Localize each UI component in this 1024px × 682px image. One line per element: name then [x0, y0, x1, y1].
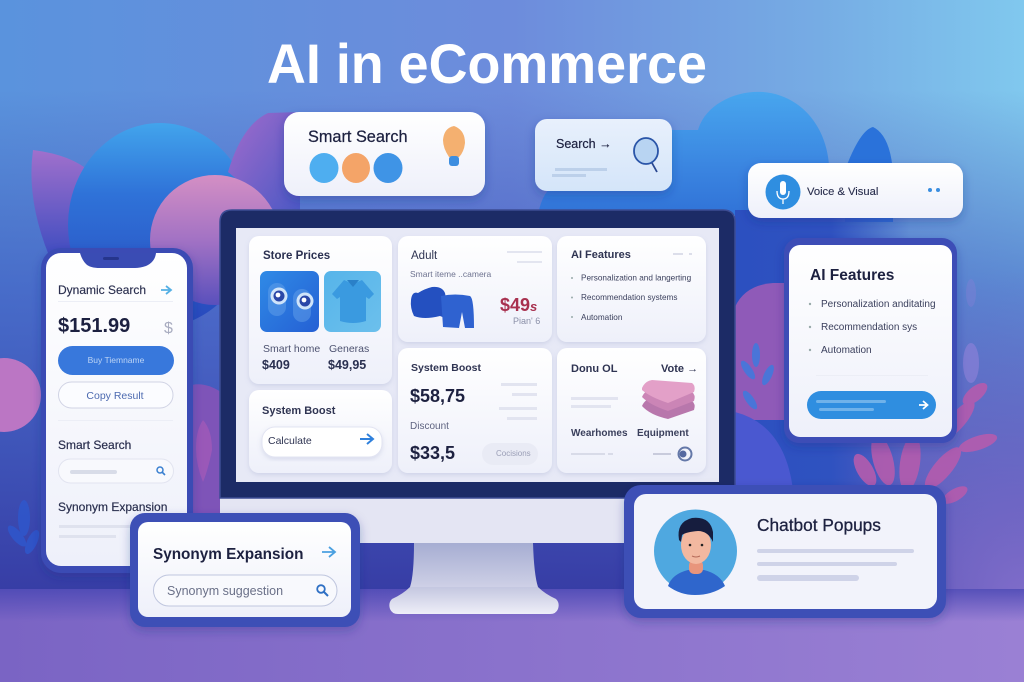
title: AI in eCommerce — [267, 32, 707, 95]
panel: System Boost prices: $33,5 — [410, 443, 455, 463]
monitor stand — [389, 543, 559, 614]
icon: microphone — [766, 174, 800, 210]
panel: Donu OL: Donu OL — [571, 363, 618, 375]
panel: Chatbot Popups: Chatbot Popups — [757, 515, 881, 535]
icon: pink stack — [642, 380, 695, 419]
floor — [0, 589, 1024, 682]
panel: System Boost prices — [398, 348, 552, 473]
panel: Donu OL: Equipment — [637, 428, 689, 439]
panel: Store Prices: $49,95 — [328, 358, 366, 372]
panel: System Boost calculate — [249, 390, 392, 473]
panel: Synonym Expansion card — [130, 513, 360, 627]
foliage: right — [849, 379, 999, 507]
icon: magnifier — [634, 138, 658, 172]
background shapes — [0, 92, 910, 530]
arrow — [322, 547, 335, 557]
panel: phone: $151.99 — [58, 315, 130, 337]
panel: Store Prices: $409 — [262, 358, 290, 372]
panel: Adult: Adult — [411, 250, 438, 262]
monitor — [220, 210, 735, 543]
panel: phone — [41, 248, 193, 573]
panel: AI Features large — [784, 238, 957, 443]
panel: System Boost prices: Cocisions — [496, 449, 531, 458]
avatar — [654, 510, 737, 595]
icon: eyes tile — [260, 271, 319, 332]
panel: System Boost prices: $58,75 — [410, 386, 465, 406]
panel: Adult: Smart iteme ..camera — [410, 269, 492, 279]
panel: Store Prices: Smart home — [263, 343, 320, 355]
icon: shirt tile — [324, 271, 381, 332]
panel: Store Prices: Store Prices — [263, 250, 330, 262]
panel: Synonym Expansion card: Synonym Expansion — [153, 546, 303, 563]
panel: System Boost calculate: Calculate — [268, 435, 312, 447]
search input: Synonym suggestion — [167, 584, 283, 598]
panel: AI Features small: Personalization and langerting — [581, 274, 692, 282]
panel: Adult — [398, 236, 552, 342]
panel: AI Features large: AI Features — [810, 267, 894, 284]
panel: phone: Smart Search — [58, 438, 131, 452]
panel: Donu OL: Wearhomes — [571, 428, 628, 439]
icon: light bulb — [443, 126, 465, 166]
button: buy: Buy Tiemname — [88, 355, 145, 365]
panel: Chatbot Popups — [624, 485, 946, 618]
panel: phone: Dynamic Search — [58, 283, 146, 297]
right blue blob — [538, 92, 832, 222]
button: buy — [58, 346, 174, 375]
panel: AI Features small: AI Features — [571, 249, 631, 261]
arrow — [360, 434, 373, 444]
arrow — [161, 286, 171, 294]
panel: AI Features small: Automation — [581, 313, 623, 322]
panel: Store Prices — [249, 236, 392, 384]
panel: Smart Search card — [284, 112, 485, 196]
panel: Store Prices: Generas — [329, 343, 369, 355]
panel: AI Features large: Personalization anditating — [821, 299, 936, 310]
panel: Voice & Visual — [748, 163, 963, 218]
search input — [154, 575, 337, 606]
panel: Smart Search card: Smart Search — [308, 128, 408, 146]
dots — [310, 153, 402, 183]
phone notch — [80, 253, 156, 268]
panel: AI Features small: Recommendation systems — [581, 293, 677, 302]
panel: AI Features large: Recommendation sys — [821, 322, 917, 333]
panel: System Boost prices: Discount — [410, 421, 449, 432]
panel: AI Features large: Automation — [821, 345, 872, 356]
icon: blue garments — [411, 287, 474, 328]
panel: Donu OL: Vote → — [661, 363, 698, 375]
panel: Adult: $49s — [500, 295, 537, 315]
button: copy result: Copy Result — [86, 390, 144, 402]
button: copy result — [58, 382, 173, 408]
panel: AI Features small — [557, 236, 706, 342]
foliage: pale leaves right — [963, 279, 979, 383]
panel: System Boost prices: System Boost — [411, 362, 482, 374]
panel: Donu OL — [557, 348, 706, 473]
panel: Voice & Visual: Voice & Visual — [807, 186, 878, 198]
panel: System Boost calculate: System Boost — [262, 405, 336, 417]
panel: phone: Synonym Expansion — [58, 500, 167, 514]
panel: Adult: Pian' 6 — [513, 316, 540, 326]
panel: phone: $ — [164, 320, 173, 337]
foliage: blue left of panel — [738, 343, 776, 411]
button: blue with arrow — [807, 391, 936, 419]
search field — [58, 459, 174, 483]
foliage: left — [5, 500, 42, 556]
panel: Search card: Search → — [556, 137, 612, 151]
panel: Search card — [535, 119, 672, 191]
